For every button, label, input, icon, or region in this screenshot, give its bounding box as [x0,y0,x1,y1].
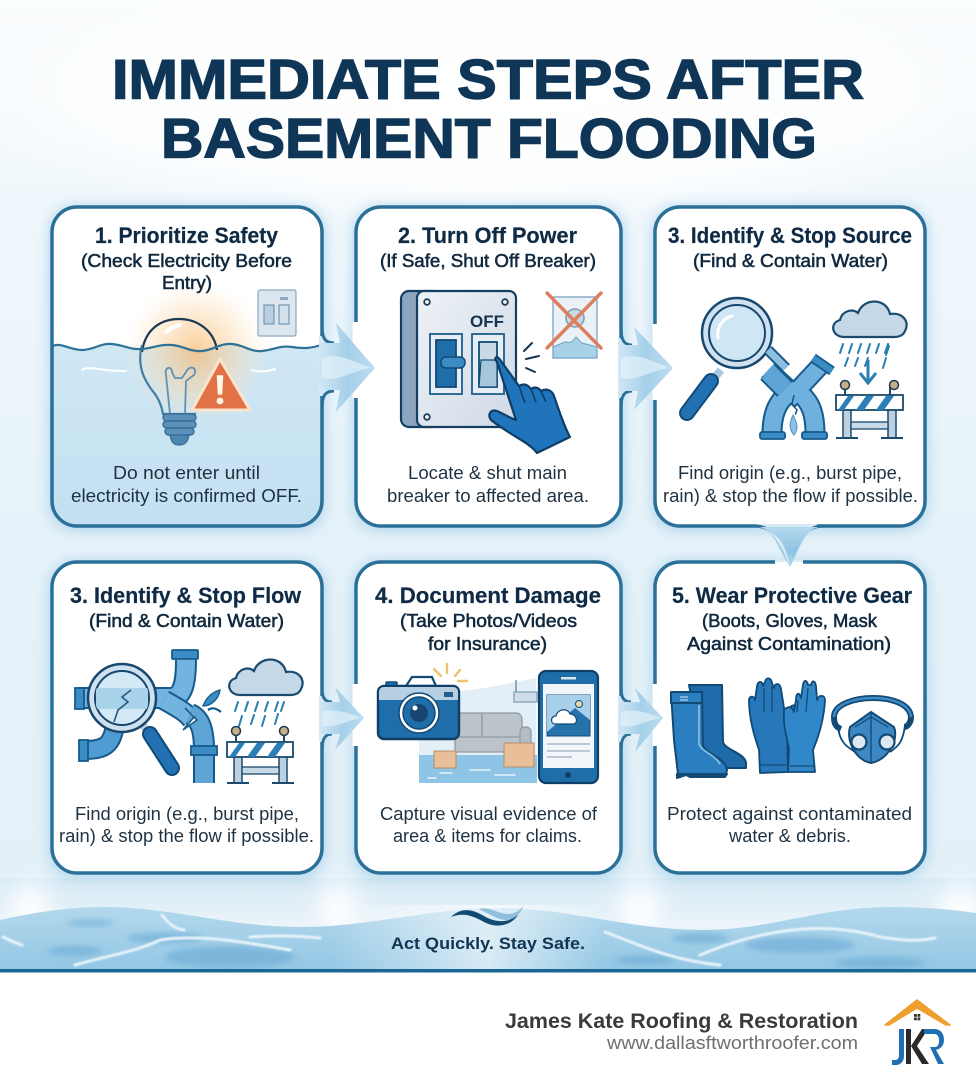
description [380,803,598,846]
water band [0,878,976,972]
step 1 description: Do not enter until [113,462,260,483]
warning glow [124,280,268,424]
subtitle [400,611,577,654]
water fill [50,344,324,530]
step 1 subtitle: (Check Electricity Before [81,251,292,271]
description: rain) & stop the flow if possible. [59,825,314,846]
step 1 subtitle [81,251,292,293]
heading: 3. Identify & Stop Flow [70,583,302,608]
panel: step 4 document damage [356,562,621,873]
step 2 heading: 2. Turn Off Power [398,223,577,248]
step 1 subtitle: Entry) [162,273,212,293]
icon: barricade [227,726,294,783]
subtitle: (Boots, Gloves, Mask [702,611,878,631]
description: rain) & stop the flow if possible. [663,485,918,506]
arrow: step 4 to 5 [618,684,663,752]
arrow: step 3 to 5 [744,524,834,567]
icon: respirator mask [834,698,911,763]
border [52,207,322,526]
step 1 heading: 1. Prioritize Safety [95,223,279,248]
icon: magnifying glass [88,664,172,768]
icon: rubber boots [671,685,746,778]
icon: breaker switch: OFF [470,313,504,331]
footer company name: James Kate Roofing & Restoration [505,1009,858,1033]
icon: camera flash [434,664,467,681]
description [59,803,314,846]
panel: step 3 identify and stop source [655,207,925,526]
icon: camera [378,677,459,739]
icon: light bulb [140,319,217,445]
icon: magnifying glass [687,298,786,413]
waterline [53,344,321,351]
subtitle: for Insurance) [428,634,547,654]
icon: barricade [836,380,903,438]
heading: 4. Document Damage [375,583,601,608]
description [667,803,912,846]
icon: crossed out flooded panel [547,293,601,358]
icon: breaker switch [401,291,516,427]
heading: 3. Identify & Stop Source [668,223,912,248]
description: area & items for claims. [393,825,582,846]
description: water & debris. [728,825,851,846]
icon: pointing gloved hand [489,357,570,453]
title: IMMEDIATE STEPS AFTER [112,48,864,110]
arrow: step 2 to 3 [618,324,673,410]
subtitle: (Take Photos/Videos [400,611,577,631]
icon: burst pipe [760,358,832,439]
heading: 5. Wear Protective Gear [672,583,912,608]
panel: step 5 wear protective gear [655,562,925,873]
icon: flooded room [419,678,537,783]
subtitle [687,611,891,654]
icon: smartphone [539,671,598,783]
icon: wave mark [451,906,523,926]
panel: step 2 turn off power [356,207,621,526]
step 2 description: breaker to affected area. [387,485,589,506]
icon: wall switch [258,290,296,336]
step 2 subtitle: (If Safe, Shut Off Breaker) [380,251,596,271]
icon: gloves [749,678,825,773]
title [112,48,864,170]
subtitle: (Find & Contain Water) [693,251,888,271]
icon: click marks [524,343,539,372]
logo [885,1000,950,1065]
arrow: row two step 3 to 4 [319,684,364,750]
icon: burst pipes [75,650,221,783]
description: Protect against contaminated [667,803,912,824]
step 2 description [387,462,589,506]
step 2 description: Locate & shut main [408,462,567,483]
title: BASEMENT FLOODING [161,108,817,170]
description: Find origin (e.g., burst pipe, [75,803,299,824]
description [663,462,918,506]
description: Find origin (e.g., burst pipe, [678,462,902,483]
ripples [82,368,275,371]
step 1 description [71,462,302,506]
subtitle: Against Contamination) [687,634,891,654]
website: www.dallasftworthroofer.com [606,1033,858,1053]
icon: warning triangle [192,359,250,410]
arrow: step 1 to 2 [319,322,375,412]
panel: step 1 prioritize safety [50,207,324,530]
icon: rain cloud [229,660,303,726]
description: Capture visual evidence of [380,803,598,824]
icon: rain cloud [833,302,907,383]
card shadows [49,206,928,878]
tagline: Act Quickly. Stay Safe. [391,934,585,953]
panel: identify and stop flow [52,562,322,873]
subtitle: (Find & Contain Water) [89,611,284,631]
footer company name [505,1009,858,1053]
step 1 description: electricity is confirmed OFF. [71,485,302,506]
